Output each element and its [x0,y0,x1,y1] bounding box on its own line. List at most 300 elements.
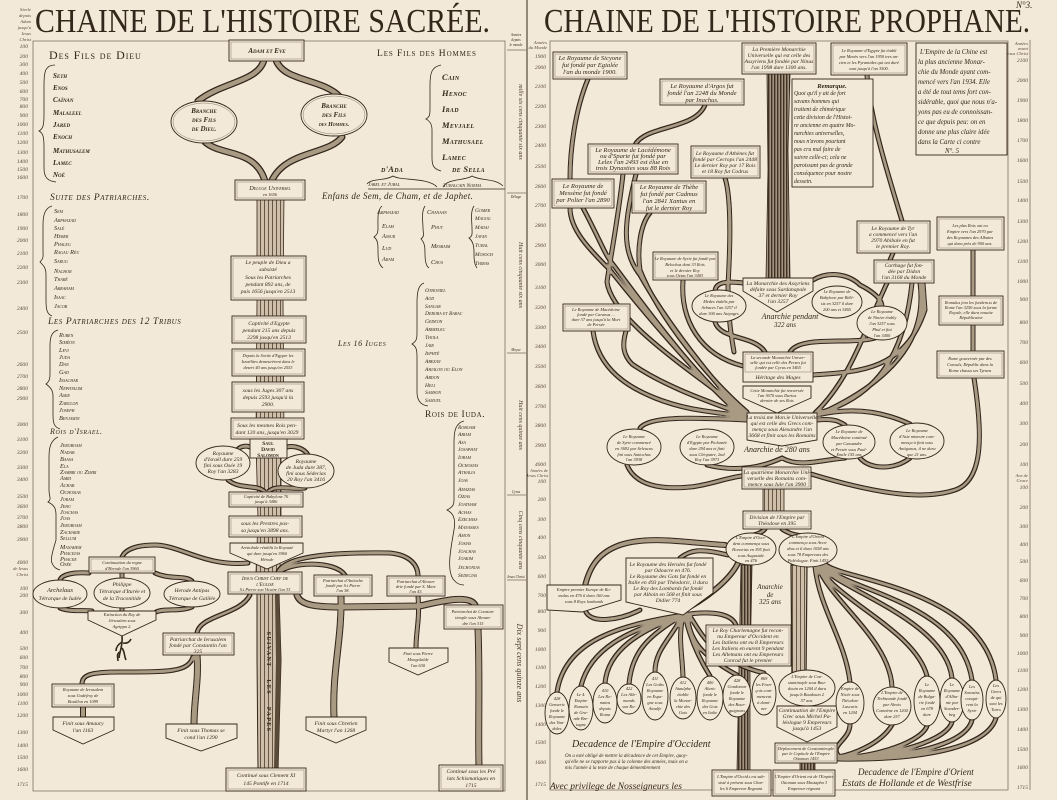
box: kingdom of Macedon: dure 37 ans jusqu'à la Mort [572,317,621,322]
list: kings of Judah: Joakim [458,556,474,562]
box: Carthage: dée par Didon [888,269,920,275]
list: kings of Judah: Joas [458,478,468,484]
central strip: vertical durations: le monde [509,43,523,47]
box: Carthage: l'an 3168 du Monde [882,275,927,281]
year scale: right page, left side: 1900 [535,54,546,60]
oval: third monarchy successor, Macedon: Macédoine continué [830,435,868,440]
central strip: vertical durations: depuis [511,38,521,42]
year scale: left page: 1000 [17,692,28,698]
box: universal flood: Deluge Universel [248,185,292,192]
box: kingdom of Tyre: a commencé vers l'an [869,232,917,238]
panel: remark: Remarque. [816,83,847,90]
oval: branch of the sons of God: de Dieu. [191,125,216,133]
ovals: decadence of Western empire: Roma [599,712,611,717]
list: sons of men: Cain [442,72,460,82]
year scale: left page: 1000 [17,122,28,128]
year scale: left page: depuis [19,13,31,18]
box: Saul David Salomon: Salomon [257,453,279,459]
year scale: left page: 3700 [16,515,28,521]
box: western empire end [712,770,771,796]
list: sons of God: Seth [53,72,68,80]
oval: third monarchy successor, Egypt: Roy l'an 3973 [694,457,720,462]
box: Charlemagne [706,625,791,666]
box: fourth monarchy [742,467,811,489]
box: western empire end: sisté à présent sous Char- [718,780,764,785]
box: kingdom of Argos: fondé l'an 2248 du Monde [667,90,737,97]
year scale: right page, right side: 300 [1019,421,1028,427]
ovals: decadence of Eastern empire: rent la [966,702,979,707]
ovals: decadence of Western empire: mands [623,698,635,703]
ovals: decadence of Western empire: des Gots [702,704,718,709]
box: first kings of Albania: Empire vers l'an 2970 par [946,229,993,234]
list: kings of Israel: Amri [59,475,72,482]
box: patriarchate of Jerusalem: fondé par Constantin l'an [169,642,227,649]
ovals: decadence of Western empire: fonde le [730,690,744,695]
year scale: right page, left side: 1200 [535,684,546,690]
year scale: right page, right side: 800 [1020,320,1028,326]
year scale: left page: 3800 [16,524,28,530]
panel: empire of China: chie du Monde ayant com- [918,69,991,76]
year scale: right page, right side: 1600 [1017,158,1028,164]
box: kingdom of Macedon: Le Royaume de Macédoine [571,307,620,312]
box: kingdom of Argos: Le Royaume d'Argos fut [669,83,734,90]
box: kingdom of Tyre: Le Royaume de Tyr [870,226,915,232]
list: sons of God: Malaleel [52,109,82,117]
year scale: left page: 600 [20,655,28,661]
box: right side kingdom: Royale, elle dura ensuite [948,310,993,316]
ovals: decadence of Western empire: 428 [554,696,561,701]
year scale: left page: 200 [20,593,28,599]
oval: branch of the sons of God: Branche [190,107,217,115]
year scale: right page, left side: 500 [538,555,546,561]
year scale: left page: 900 [20,682,28,688]
oval: Philippe: de la Traconitide [103,596,142,602]
box: first kings of Albania: qui dura près de 900 ans. [948,241,992,246]
list: sons of Sem, Cham and Japhet: Chanaan [427,209,447,216]
list: kings of Judah: Abiam [457,432,472,438]
box: captivity in Egypt: Captivité d'Egypte [248,321,290,327]
box: third monarchy: mença sous Alexandre l'an [752,427,812,433]
list: sons of men: Irad [441,104,459,114]
ovals: decadence of Western empire: Les Ro- [597,694,612,699]
ovals: decadence of Western empire: Les Goths [645,682,664,687]
year scale: right page, right side: 200 [1020,505,1028,511]
year scale: right page, left side: Années de [529,468,548,473]
ovals: decadence of Eastern empire: en 1204 [843,710,858,715]
ovals: decadence of Eastern empire: Le [924,682,929,687]
panel: remark: traitent de chimérique [794,107,846,113]
box: people of God: pendant 892 ans, de [244,282,291,288]
year scale: left page: 3300 [16,465,28,471]
text: anarchy 322 years [761,312,819,329]
year scale: right page, right side: 600 [1020,360,1028,366]
ovals: decadence of Western empire: 422 [626,686,633,691]
year scale: right page, left side: 2400 [535,143,546,149]
box: Rome republic: Rome chassa ses Tyrans [948,368,992,373]
box: exodus and Moses: desert 40 ans jusqu'en 2553 [244,365,293,370]
year scale: right page, right side: 1200 [1017,239,1028,245]
box: kingdom of Messene: par Polier l'an 2890 [555,197,611,204]
list: sons of men: Mathusael [441,136,484,146]
ovals: decadence of Eastern empire: nie par [946,700,959,705]
oval: third monarchy successor, Macedon: Le Royaume de [834,429,863,434]
year scale: left page: 4000 [17,560,28,566]
ovals: decadence of Western empire: mencent [757,694,772,699]
box: Heruli, Goths and Lombards [626,558,713,615]
list: kings of Israel: Ochosias [60,489,81,496]
box: exodus and Moses [232,349,305,376]
oval: third monarchy successor, Macedon: Emile 155 ans [835,452,862,457]
year scale: left page: 2200 [17,265,28,271]
ovals: decadence of Eastern empire: Le [949,682,954,687]
box: first Western empire: Empire premier Europe de Ro- [556,587,612,592]
year scale: left page: 3100 [16,437,28,443]
text: decadence of Western empire: qu'elle ne se rapporte pas à la colonne des années, mais on a [565,760,688,765]
list: sons of God: Des Fils de Dieu [49,48,142,62]
oval: kingdom of Judah: 20 Roy l'an 3416 [287,477,325,483]
list: twelve tribes: Siméon [59,339,75,346]
oval: Herode Antipas: Herode Antipas [174,588,209,594]
list: following patriarchs: Tharé [54,276,68,283]
list: sons of God: Caïnan [53,96,74,104]
year scale: left page: 1800 [17,212,28,218]
ovals: decadence of Western empire: 869 [761,676,768,681]
oval: western empire: Honorius en 395 finit [731,547,771,552]
box: ended under Amaury [53,717,114,744]
list: the sixteen judges [337,283,463,406]
ovals: decadence of Western empire: Royaume [646,688,663,693]
panel: empire of China: a été de tout tems fort con- [918,89,992,96]
box: patriarchate of Constantinople: dre l'an 315 [462,621,484,626]
ovals: decadence of Eastern empire: Turcs [991,707,1001,712]
box: eastern empire end: Ottoman sous Mustapha 3 [781,780,828,785]
box: patriarchate of Constantinople [444,605,503,629]
oval: branch of the sons of men: Branche [320,102,347,110]
box: Heruli, Goths and Lombards: Le Royaume des Herules fut fondé [629,561,707,568]
box: kingdom of Thebes: fut le dernier Roy [646,205,692,212]
box: Heruli, Goths and Lombards: par Alboin en 568 et finit sous [633,591,702,598]
list: kings of Israel: Zambri ou Zimri [60,469,97,476]
box: extinction of the kings: Jérusalem sous [109,618,136,623]
list: the sixteen judges: Thola [425,335,439,341]
box: Assyrian monarchy: La Monarchie des Assyriens [745,281,810,287]
year scale: right page, right side: 2100 [1017,58,1028,64]
text: decadence of Western empire: On a esté obligé de mettre la décadence de cet Empire, quoy- [565,754,688,759]
oval: Nineveh: l'an 3257 sous [869,321,895,326]
oval: Babylon [812,286,862,318]
profane tree: main trunks [737,74,815,772]
year scale: right page, left side: 800 [538,609,546,615]
box: extinction of the kings: Agrippa 2. [112,624,131,629]
year scale: right page, left side: 3600 [534,384,546,390]
oval: third monarchy successor, Asia [890,423,944,459]
box: patriarchate of Alexandria: drie fondé par S. Marc [396,584,436,589]
box: Heruli, Goths and Lombards: Didier 774 [655,598,680,604]
box: under the judges: depuis 2593 jusqu'à la [243,395,293,401]
oval: Nineveh: de Ninive étably [868,315,896,320]
ovals: decadence of Eastern empire: Théodore [842,698,858,703]
box: kingdom of Syria: sous Ozias l'an 3403 [667,273,704,278]
ovals: decadence of Eastern empire: Royaume [943,688,960,693]
text: anarchy 325 years [756,583,783,606]
box: patriarchate of Constantinople: Patriarchat de Constan- [451,609,495,614]
ovals: decadence of Western empire: 410 [602,688,609,693]
box: people of God: Le peuple de Dieu a [244,260,291,266]
year scale: left page: 1300 [17,730,28,736]
ovals: decadence of Eastern empire: Syrie [967,708,977,713]
oval: third monarchy successor, Asia: Le Royaume [905,428,928,433]
box: under the high priests [229,516,302,537]
list: kings of Israel: Ela [59,463,69,470]
list: following patriarchs: Phaleg [53,241,71,248]
box: first monarchy: Assyriens fut fondée par Ninus [744,58,813,65]
year scale: right page, left side: 300 [537,517,546,523]
box: kingdom of Egypt: par Menès vers l'an 1950 tres an- [838,54,899,59]
list: sons of Sem, Cham and Japhet: Tubal [475,243,489,249]
panel: remark: Quoi qu'il y ait de fort [794,90,846,97]
year scale: right page, right side: 200 [1020,442,1028,448]
oval: Babylon: Le Royaume de [822,289,851,294]
oval: eastern empire [779,533,837,567]
box: Charlemagne: Le Roy Charlemagne fut recon- [712,627,783,634]
list: sons of men: Henoc [441,88,467,98]
list: kings of Judah: Ochosias [458,463,478,469]
list: kings of Israel: Joachas [60,509,78,516]
oval: third monarchy successor, Egypt: Le Royaume [695,434,718,439]
year scale: left page: Siecle [20,7,31,12]
oval: third monarchy successor, Syria [607,429,661,465]
box: kingdom of Thebes: l'an 2841 Xantus en [643,198,696,205]
oval: third monarchy successor, Egypt: dure 294 ans et finit [689,446,725,451]
year scale: right page, left side: 3100 [534,285,546,291]
box: kingdom of Athens: Le Royaume d'Athènes fut [695,150,755,157]
year scale: right page, left side: 100 [538,479,546,485]
list: sons of God: Mathusalem [52,147,90,155]
oval: third monarchy successor, Asia: que 21 ans. [907,452,927,457]
oval: branch of the sons of men [301,94,367,136]
box: exodus and Moses: Depuis la Sortie d'Egypte les [242,353,294,358]
year scale: left page [13,7,32,788]
list: sons of God: Lamec [52,159,72,167]
box: first kings of Albania: des Royaumes des Albains [947,235,993,240]
box: kingdom of Argos [660,79,744,105]
year scale: right page, left side: 200 [538,497,546,503]
year scale: right page, right side: 1500 [1017,179,1028,185]
box: right side kingdom: Rome l'an 3250 sous la forme [944,305,997,310]
year scale: right page, right side: 1900 [1017,98,1028,104]
box: kingdom of Tyre [857,221,930,253]
list: following patriarchs: Ragau Réu [53,249,80,256]
box: second monarchy: selle qui est celle des Perses fut [750,360,807,365]
box: kingdom of Syria: Belochus dont 33 Rois [665,262,705,267]
box: Carthage [874,260,934,283]
year scale: left page: 1500 [17,167,28,173]
list: kings of Judah: Josaphat [458,447,478,453]
ovals: decadence of Eastern empire: Les [968,684,975,689]
list: kings of Judah [425,410,485,585]
list: sons of Sem, Cham and Japhet: Chus [431,259,443,266]
ovals: decadence of Eastern empire: par Alexis [882,702,901,707]
year scale: right page, right side: 1100 [1017,668,1028,674]
central strip: vertical durations [506,33,526,702]
box: Persian monarchy end [743,386,811,413]
box: patriarchate of Jerusalem: 325 [193,649,202,655]
text: decadence of Western empire: mis l'année à la teste de chaque démembrement [565,766,661,771]
oval: Nineveh [857,306,907,340]
year scale: left page: 1700 [17,195,28,201]
list: kings of Israel: Achab [59,482,75,489]
list: kings of Israel: Joram [60,496,75,503]
panel: remark: re ancienne en quatre Mo- [794,123,855,129]
title: sacred history: CHAINE DE L'HISTOIRE SACRÉE. [35,3,490,40]
list: twelve tribes: Nephtalim [58,385,83,392]
ovals: decadence of Western empire: gne sous [647,700,663,705]
list: kings of Israel: Sellum [60,535,77,542]
year scale: left page: 200 [20,54,28,60]
list: sons of Sem, Cham and Japhet: Madai [474,225,489,231]
list: the sixteen judges: Les 16 Iuges [337,339,386,348]
box: Babylonian captivity [229,492,303,507]
oval: Herode Antipas: Tétrarque de Galilée [169,596,216,602]
profane tree: branches from the ancient kingdoms [570,75,979,495]
list: sons of men: Les Fils des Hommes [377,49,477,59]
box: Heruli, Goths and Lombards: Le Roy des Lombards fut fondé [632,585,703,592]
ovals: decadence of Western empire: des Bour- [728,702,746,707]
central strip: vertical durations: Dix sept cens quinze ans [515,623,524,702]
year scale: left page: 1100 [17,701,28,707]
ovals: decadence of Eastern empire: en 678 [921,706,934,711]
ovals: decadence of Eastern empire: dure 257 [884,714,901,719]
box: division of the empire [743,511,811,529]
list: the sixteen judges: Abezan [424,359,441,365]
year scale: left page: 1500 [17,755,28,761]
oval: Nineveh: Le Royaume [870,309,893,314]
box: continuation of Herod: d'Herode l'an 3960 [105,566,140,571]
year scale: left page: 600 [20,89,28,95]
list: twelve tribes: Les Patriarches des 12 Tribus [47,317,181,327]
year scale: right page, right side: Grace [1017,478,1028,483]
box: kingdom of Athens: fondé par Cecrops l'an 2448 [693,156,757,163]
panel: remark: narchies universelles, [794,131,845,137]
ovals: decadence of Eastern empire [836,676,1006,726]
list: sons of men: Lamec [441,152,467,162]
text: anarchy 325 years: 325 ans [758,598,781,606]
box: Rome republic [937,351,1004,378]
box: ended under Chretien [306,717,366,743]
box: kingdom of Macedon [563,304,630,331]
box: kingdom of Argos: par Inachus. [684,97,719,104]
list: kings of Judah: Joatham [458,502,477,508]
box: first kings of Albania [937,217,1004,250]
box: first Western empire: sous 8 Roys lombards [565,599,603,604]
ovals: decadence of Western empire: Gots [679,710,687,715]
ovals: decadence of Western empire: Alaric [704,686,716,691]
box: continued under Clement XI: Continué sous Clement XI [237,773,296,779]
list: kings of Judah: Joachas [458,549,476,555]
ovals: decadence of Western empire: ner [761,706,767,711]
box: patriarchate of Alexandria [387,576,445,596]
oval: third monarchy successor, Syria: fini sous Antiochus [617,452,651,457]
list: kings of Judah: Amazias [457,487,475,493]
year scale: left page: 400 [20,71,28,77]
box: under the judges: 2900. [262,402,274,408]
ovals: decadence of Western empire: nde Bre- [573,716,589,721]
box: Saul David Salomon: David [261,447,275,453]
list: sons of Sem, Cham and Japhet: Lud [381,245,391,252]
list: sons of men: de Sella [451,164,485,174]
box: ended under Pierre Mongolalde: Finit sous Pierre [402,651,433,656]
list: the sixteen judges: Samuel [425,398,442,404]
text: anarchy 280 years: Anarchie de 280 ans [743,445,810,454]
oval: eastern empire: Paléologue. Finit 1453 [787,558,829,563]
list: kings of Judah: Ozias [458,494,470,500]
box: ended under Thomas: Finit sous Thomas se [176,728,225,734]
box: kingdom of Sicyon: l'an du monde 1900. [563,69,617,76]
year scale: right page, right side: 400 [1020,401,1028,407]
year scale: left page: 1400 [17,743,28,749]
text: decadence of Eastern empire [841,767,974,789]
ovals: decadence of Western empire: en Italie [703,710,717,715]
year scale: right page, left side: 3800 [534,423,546,429]
year scale: left page: 300 [19,610,28,616]
central strip: vertical durations: Moyse [510,348,521,352]
year scale: right page, left side: 2200 [535,104,546,110]
text: anarchy 322 years: Anarchie pendant [761,312,819,321]
list: sons of God: Enoch [52,133,73,141]
box: Christ head of the church: S.t Pierre son Vicaire l'an 33 [240,587,291,592]
ovals: decadence of Eastern empire: Nicée sous [840,692,860,697]
year scale: right page, right side: 900 [1020,297,1028,303]
box: kingdom of Jerusalem: Royaume de Ierusalem [62,687,103,692]
list: the sixteen judges: Samson [425,390,441,396]
list: the sixteen judges: Gedeon [425,319,443,325]
box: kingdom of Thebes: fut fondé par Cadmus [640,191,698,198]
oval: branch of the sons of men: des Fils [321,111,346,119]
box: people of God: Sous les Patriarches [245,275,291,281]
list: following patriarchs: Salé [54,225,65,232]
year scale: right page, left side: 3200 [534,305,546,311]
central strip: vertical durations: mille six cens cinquante six ans [517,84,523,160]
list: following patriarchs: Jacob [54,303,68,310]
list: the sixteen judges: Debora et Barac [424,311,463,317]
ovals: decadence of Western empire: çois com- [756,688,773,693]
box: kingdom of Jerusalem: Bouillon en 1099 [68,699,99,704]
box: kingdom of Egypt [831,43,907,75]
text: decadence of Eastern empire: Estats de Hollande et de Westfrise [841,778,972,789]
oval: kingdom of Judah [278,454,334,488]
oval: third monarchy successor, Macedon: par Cassandre [835,441,862,446]
panel: empire of China [916,43,1007,155]
box: Charlemagne: Les Italiens ont eu 8 Empereurs [711,640,784,646]
list: twelve tribes: Benjamin [59,415,80,422]
box: ended under Thomas: cond l'an 1290 [184,735,218,741]
year scale: right page, left side: 2300 [535,124,546,130]
oval: kingdom of Judah: fini sous Sédecias [286,470,326,477]
list: kings of Judah: Josias [458,541,471,547]
box: Charlemagne: nu Empereur d'Occident en [717,634,779,640]
box: right side kingdom: Républicaine [958,315,983,320]
box: patriarchate of Alexandria: Patriarchat d'Alexan- [396,579,436,584]
oval: third monarchy successor, Syria: Le Royaume [622,434,645,439]
box: captivity in Egypt: pendant 215 ans depuis [242,328,295,334]
list: kings of Judah: Ezechias [457,517,477,523]
box: eastern empire end: L'Empire d'Orient est de l'Empire [773,774,834,779]
box: kingdom of Jerusalem [52,684,114,707]
box: kingdom of Messene: Messène fut fondé [558,190,608,197]
panel: remark: cette division de l'Histoi- [794,115,852,121]
box: continuation of Herod: Continuation du regne [102,560,142,565]
box: patriarchate of Antioch: fondé par S.t Pierre [326,583,360,588]
